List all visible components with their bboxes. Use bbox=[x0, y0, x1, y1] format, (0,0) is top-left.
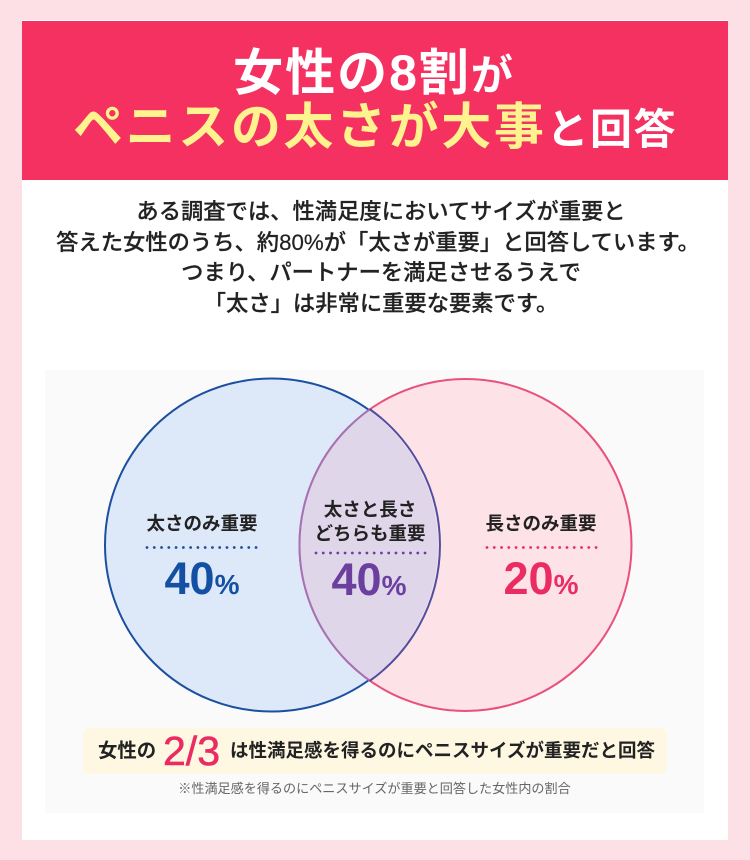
left circle edge in overlap bbox=[370, 409, 440, 681]
dotted divider left bbox=[147, 546, 258, 549]
callout lead text: 女性の bbox=[98, 740, 156, 762]
title line 2: ペニスの太さが大事と回答 bbox=[73, 99, 677, 155]
intro text: ある調査では、性満足度においてサイズが重要と bbox=[136, 199, 626, 224]
venn diagram bbox=[104, 378, 632, 712]
right label: 長さのみ重要 bbox=[485, 513, 596, 534]
left circle bbox=[105, 378, 438, 712]
middle label bbox=[314, 499, 426, 544]
footnote: ※性満足感を得るのにペニスサイズが重要と回答した女性内の割合 bbox=[178, 781, 571, 796]
title line 1: 女性の8割が bbox=[233, 45, 513, 101]
intro text: つまり、パートナーを満足させるうえで bbox=[181, 260, 581, 285]
overlap region bbox=[298, 410, 438, 680]
middle value: 40% bbox=[332, 554, 406, 605]
chart panel bbox=[83, 378, 667, 794]
intro text: 「太さ」は非常に重要な要素です。 bbox=[204, 290, 558, 316]
intro text bbox=[56, 199, 700, 316]
callout text: は性満足感を得るのにペニスサイズが重要だと回答 bbox=[230, 740, 655, 761]
dotted divider middle bbox=[316, 552, 426, 554]
right circle bbox=[300, 379, 632, 711]
intro text: 答えた女性のうち、約80%が「太さが重要」と回答しています。 bbox=[56, 230, 700, 254]
left value: 40% bbox=[165, 553, 239, 604]
middle label: 太さと長さ bbox=[324, 499, 416, 520]
middle label: どちらも重要 bbox=[314, 522, 426, 544]
callout fraction: 2/3 bbox=[163, 728, 220, 774]
callout bbox=[83, 728, 667, 774]
right value: 20% bbox=[504, 553, 578, 604]
left label: 太さのみ重要 bbox=[146, 513, 258, 534]
header banner bbox=[22, 21, 728, 180]
dotted divider right bbox=[487, 546, 598, 549]
